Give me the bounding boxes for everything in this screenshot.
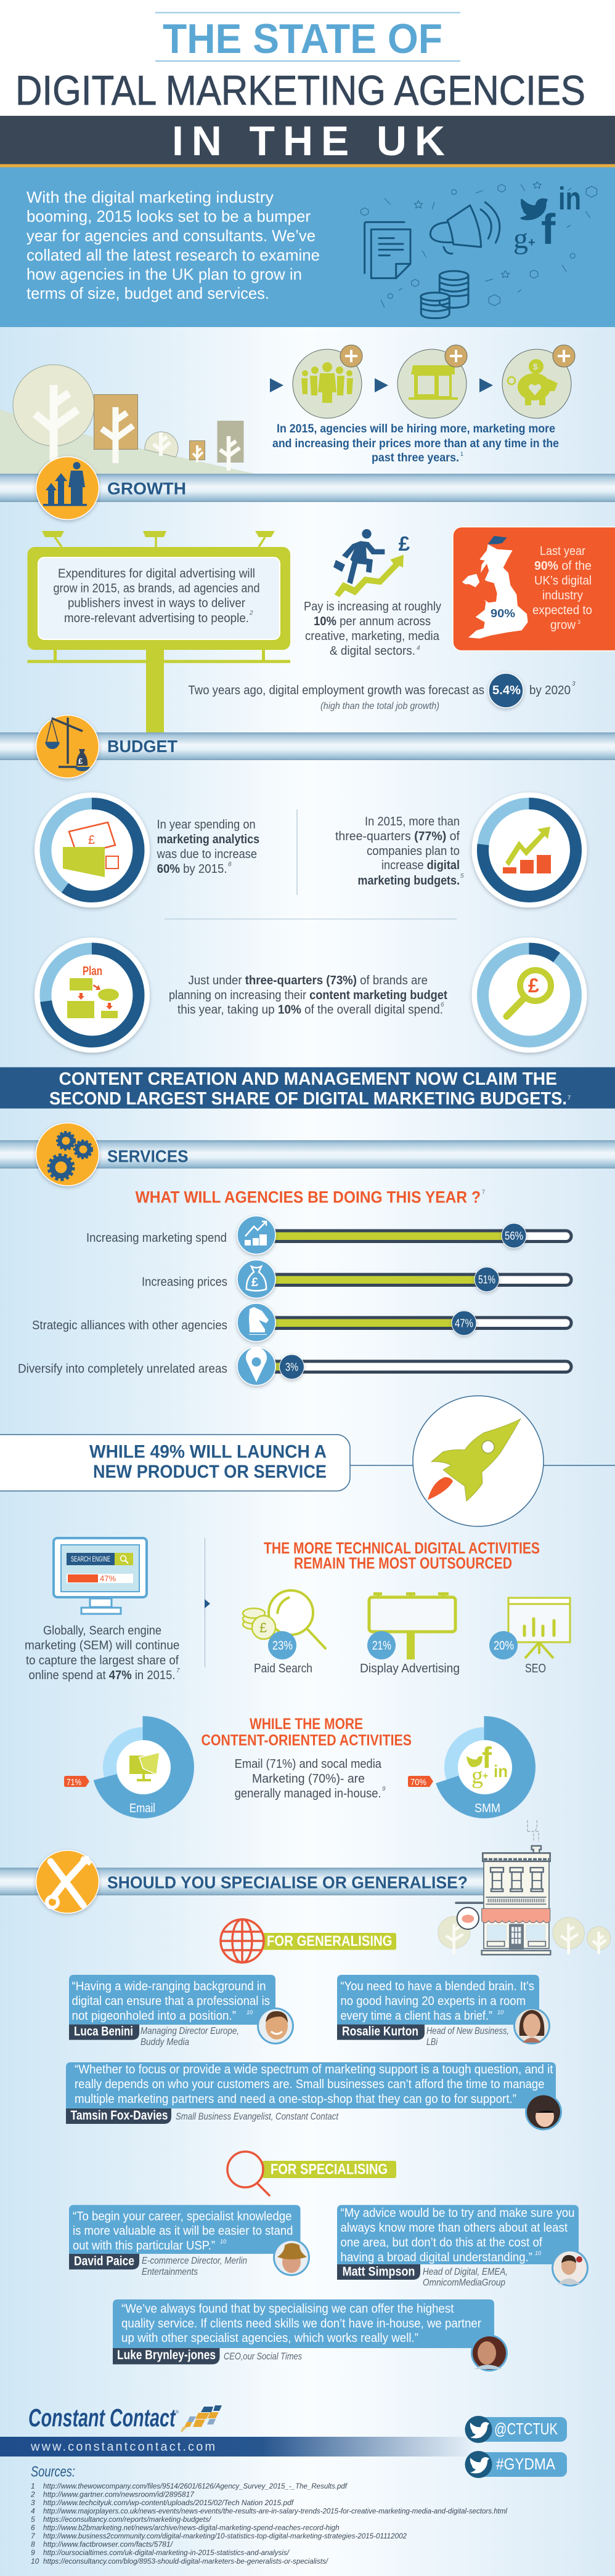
quote: rosalie kurton: Head of New Business,: [426, 2026, 509, 2036]
text: in-house: 9: [382, 1786, 386, 1792]
quote: rosalie kurton: Rosalie Kurton: [342, 2024, 418, 2038]
text: search engine marketing: Globally, Search engine: [43, 1624, 161, 1637]
circle: piggy bank: $: [533, 362, 538, 371]
sources: 6: [31, 2523, 35, 2532]
uk text: industry: [542, 589, 583, 602]
quote: luke brynley-jones: Luke Brynley-jones: [117, 2348, 216, 2362]
badge 5.4%: [489, 673, 523, 708]
quote: rosalie kurton: 10: [497, 2009, 503, 2015]
section header: budget: [0, 715, 615, 778]
quote: rosalie kurton: no good having 20 experts in a room: [340, 1995, 526, 2008]
intro text: [26, 188, 320, 302]
uk text: grow: [550, 618, 576, 632]
sources: http://www.factbrowser.com/facts/5781/: [43, 2540, 174, 2549]
quote: matt simpson: Head of Digital, EMEA,: [423, 2267, 508, 2277]
text: pay increase: creative, marketing, media: [305, 630, 440, 643]
section header: services: [0, 1123, 615, 1186]
row: prices 51%: 51%: [478, 1274, 495, 1286]
section header: growth: [0, 457, 615, 520]
billboard text: more-relevant advertising to people.: [64, 612, 249, 625]
text: digital employment: (high than the total job growth): [320, 701, 439, 711]
intro text: booming, 2015 looks set to be a bumper: [26, 207, 311, 225]
quote: david paice: [69, 2205, 310, 2277]
icon: plan flowchart: Plan: [83, 965, 102, 978]
text: content marketing: this year, taking up 10% of the overall digital spend.: [177, 1003, 443, 1016]
intro text: year for agencies and consultants. We’ve: [26, 227, 316, 245]
quote: matt simpson: Matt Simpson: [343, 2264, 415, 2278]
heading: content oriented: [201, 1715, 412, 1749]
ring: magnifier 10%: [472, 938, 587, 1053]
billboard text: [53, 567, 260, 625]
sources: 5: [31, 2515, 35, 2524]
quote: luca benini: 10: [246, 2009, 253, 2015]
quote: luke brynley-jones: CEO,our Social Times: [224, 2352, 302, 2362]
divider arrow: [205, 1538, 210, 1667]
text: search engine marketing: to capture the largest share of: [26, 1654, 179, 1667]
hiring marketing prices icons: [270, 345, 575, 464]
quote: rosalie kurton: “You need to have a blended brain. It’s: [340, 1980, 534, 1993]
hill and trees: [0, 365, 255, 474]
quote: luke brynley-jones: “We’ve always found that by specialising we can offer the highest: [121, 2303, 454, 2316]
text: pay increase: [304, 600, 441, 658]
text: analytics: In year spending on: [157, 818, 256, 832]
banner: content creation: [0, 1067, 615, 1109]
panel: intro: [0, 168, 615, 327]
uk text: Last year: [540, 545, 585, 558]
quote: tamsin fox-davies: [66, 2062, 562, 2130]
quote: luca benini: not pigeonholed into a position.”: [71, 2009, 236, 2023]
quote: matt simpson: [337, 2205, 589, 2288]
icon: paid search 23%: Paid Search: [254, 1662, 312, 1675]
icon: rocket: [413, 1396, 544, 1526]
banner: content creation: SECOND LARGEST SHARE OF DIGITAL MARKETING BUDGETS.: [49, 1089, 567, 1109]
icon: paid search 23%: £: [259, 1620, 267, 1635]
billboard text: Expenditures for digital advertising will: [58, 567, 255, 580]
sources: [30, 2464, 507, 2566]
heading: GROWTH: [107, 479, 186, 498]
badge 70%: 70%: [410, 1777, 426, 1788]
text: digital budgets: companies plan to: [367, 844, 460, 858]
bar chart: agency plans: [18, 1216, 571, 1385]
icons: social: +: [528, 236, 536, 249]
title band: in the uk: IN THE UK: [172, 118, 445, 164]
icon: email monitor: [129, 1752, 160, 1781]
text: analytics: 60% by 2015.: [157, 862, 227, 876]
icon: social logos: [466, 1742, 508, 1789]
icon: monitor search: SEARCH ENGINE: [71, 1555, 110, 1563]
heading: what will agencies: WHAT WILL AGENCIES BE DOING THIS YEAR ?: [136, 1188, 481, 1207]
icon: gears: [36, 1123, 99, 1186]
tree 4: [190, 441, 205, 463]
icon: scales: [36, 715, 99, 778]
sources: 4: [31, 2507, 35, 2516]
row: marketing spend 56%: 56%: [505, 1229, 523, 1242]
quote: rosalie kurton: LBi: [426, 2037, 438, 2047]
text: hiring more: [272, 423, 559, 464]
text: pay increase: Pay is increasing at roughly: [304, 600, 441, 614]
row: diversify 3%: 3%: [285, 1361, 298, 1374]
quote: matt simpson: one area, but don’t do this at the cost of: [340, 2236, 542, 2250]
badge 70%: [408, 1776, 433, 1788]
text: digital employment: [189, 673, 576, 711]
quote: david paice: “To begin your career, specialist knowledge: [73, 2209, 292, 2223]
photo: [513, 2007, 550, 2044]
label: for specialising: [227, 2152, 396, 2195]
quote: matt simpson: always know more than others about at least: [340, 2221, 568, 2235]
icon: scales: £: [78, 756, 83, 766]
row: marketing spend 56%: [86, 1216, 571, 1254]
tree 1: [13, 365, 94, 462]
button: @ctctuk: @CTCTUK: [494, 2420, 558, 2438]
icons: social: f: [541, 205, 556, 253]
row: alliances 47%: Strategic alliances with other agencies: [32, 1319, 227, 1332]
text: content marketing: Just under three-quarters (73%) of brands are: [189, 974, 428, 987]
panel: uk 90%: 90%: [491, 607, 515, 620]
icon: plan flowchart: [67, 965, 119, 1018]
text: content marketing: 6: [441, 1002, 444, 1008]
text: digital employment: by 2020: [529, 684, 571, 697]
icon: seo 20%: 20%: [494, 1639, 514, 1653]
quote: david paice: Entertainments: [142, 2267, 198, 2277]
arrow 1: [270, 378, 283, 392]
sources: 8: [31, 2540, 35, 2549]
circle: shop: [397, 345, 467, 418]
icon: social logos: in: [494, 1762, 508, 1781]
sources: http://www.b2bmarketing.net/news/archive/news-digital-marketing-spend-reaches-record-high: [43, 2523, 340, 2532]
callout: new product: [0, 1396, 615, 1526]
banner: content creation: CONTENT CREATION AND MANAGEMENT NOW CLAIM THE: [59, 1069, 557, 1089]
title band: in the uk: [0, 116, 615, 168]
donut: email 71%: [64, 1727, 183, 1815]
heading: technical activities: THE MORE TECHNICAL DIGITAL ACTIVITIES: [264, 1539, 540, 1557]
icon: growth: [36, 457, 99, 520]
photo: [273, 2239, 310, 2276]
uk text: UK’s digital: [534, 574, 592, 588]
sources: 3: [31, 2498, 35, 2507]
icon: social logos: +: [483, 1771, 488, 1781]
quote: david paice: David Paice: [74, 2254, 134, 2268]
footer bar: [0, 2437, 476, 2457]
sources: http://www.gartner.com/newsroom/id/2895817: [43, 2490, 195, 2498]
icon: shop and trees: [438, 1820, 611, 1954]
icon: social logos: f: [482, 1742, 492, 1775]
quote: luca benini: Buddy Media: [141, 2037, 189, 2047]
text: search engine marketing: marketing (SEM) will continue: [25, 1639, 180, 1653]
uk text: [532, 545, 592, 632]
icons: social: in: [558, 181, 581, 217]
text: in-house: generally managed in-house.: [235, 1787, 381, 1800]
icon: wallet: £: [88, 833, 95, 847]
text: analytics: marketing analytics: [157, 833, 259, 846]
quote: david paice: 10: [220, 2238, 226, 2245]
intro text: how agencies in the UK plan to grow in: [26, 265, 302, 283]
icon: social logos: g: [471, 1763, 483, 1789]
text: hiring more: 1: [460, 451, 463, 457]
title: the state of: THE STATE OF: [163, 15, 442, 62]
quote: david paice: out with this particular USP.”: [73, 2239, 215, 2253]
sources: 2: [30, 2490, 35, 2498]
text: analytics: 8: [228, 861, 232, 868]
quote: tamsin fox-davies: “Whether to focus or provide a wide spectrum of marketing support is a tough question, and it: [75, 2063, 553, 2076]
quote: luke brynley-jones: quality service. If clients need skills we don’t have in-house, we partner: [121, 2317, 481, 2330]
icon: display advertising 21%: 21%: [372, 1639, 391, 1653]
icon: monitor search: 47%: [100, 1574, 116, 1583]
sources: http://www.techcityuk.com/wp-content/uploads/2015/02/Tech Nation 2015.pdf: [43, 2498, 295, 2507]
quote: luca benini: Managing Director Europe,: [141, 2026, 239, 2036]
heading: technical activities: REMAIN THE MOST OUTSOURCED: [294, 1553, 512, 1572]
text: digital employment: 3: [572, 681, 576, 687]
quote: luca benini: digital can ensure that a professional is: [71, 1995, 270, 2008]
sources: 9: [31, 2548, 35, 2557]
text: search engine marketing: [25, 1624, 180, 1682]
intro text: collated all the latest research to examine: [26, 246, 320, 264]
sources: Sources:: [31, 2464, 75, 2481]
sources: 7: [31, 2532, 36, 2540]
heading: content oriented: CONTENT-ORIENTED ACTIVITIES: [201, 1732, 412, 1749]
arrow 2: [375, 378, 388, 392]
sources: http://www.business2community.com/digital-marketing/10-statistics-top-digital-marketing-strategies-2015-01112002: [43, 2532, 407, 2540]
quote: rosalie kurton: [337, 1975, 550, 2047]
text: pay increase: 4: [417, 645, 420, 652]
circle: people: [293, 345, 362, 418]
heading: what will agencies: 7: [482, 1189, 485, 1195]
text: digital budgets: three-quarters (77%) of: [335, 830, 460, 843]
panel: uk 90%: [453, 527, 615, 650]
quote: luca benini: “Having a wide-ranging background in: [71, 1980, 266, 1993]
icons: marketing doodles: [361, 182, 597, 318]
quote: luca benini: [69, 1975, 294, 2047]
text: hiring more: past three years.: [372, 452, 459, 464]
circle: piggy bank: [502, 345, 575, 418]
text: digital budgets: In 2015, more than: [365, 815, 460, 828]
tree 5: [217, 421, 244, 471]
text: hiring more: and increasing their prices more than at any time in the: [272, 437, 559, 450]
label: for generalising: FOR GENERALISING: [267, 1933, 392, 1950]
text: content marketing: planning on increasing their content marketing budget: [169, 989, 447, 1002]
icon: display advertising 21%: [360, 1592, 460, 1675]
button: #gydma: [465, 2451, 567, 2478]
heading: BUDGET: [107, 737, 177, 756]
row: prices 51%: Increasing prices: [142, 1275, 227, 1289]
billboard text: grow in 2015, as brands, ad agencies and: [53, 582, 260, 596]
text: in-house: [235, 1757, 386, 1800]
button: @ctctuk: [465, 2416, 567, 2443]
billboard text: 2: [249, 610, 253, 617]
row: alliances 47%: 47%: [455, 1317, 473, 1329]
photo: [525, 2093, 562, 2130]
quote: tamsin fox-davies: multiple marketing partners and need a one-stop-shop that they can go to for support.”: [75, 2092, 516, 2106]
text: digital employment: Two years ago, digital employment growth was forecast as: [189, 684, 484, 697]
sources: 10: [31, 2557, 39, 2566]
text: digital budgets: [335, 815, 464, 888]
text: analytics: [157, 818, 259, 876]
icon: seo 20%: [489, 1598, 570, 1675]
sources: http://www.thewowcompany.com/files/9514/2601/6126/Agency_Survey_2015_-_The_Results.pdf: [43, 2482, 348, 2490]
logo: constant contact: ®: [176, 2410, 179, 2415]
icon: magnifier: [227, 2152, 269, 2195]
ring: analytics 60%: [35, 792, 150, 908]
photo: [257, 2007, 294, 2044]
callout: new product: WHILE 49% WILL LAUNCH A: [89, 1441, 327, 1462]
uk text: 3: [577, 619, 580, 625]
text: pay increase: 10% per annum across: [314, 615, 431, 628]
tree 2: [94, 394, 138, 463]
sources: https://econsultancy.com/reports/marketing-budgets/: [43, 2515, 212, 2524]
icon: magnifier pound: [507, 970, 551, 1016]
donut: email 71%: Email: [129, 1802, 155, 1815]
icon: tools: [36, 1850, 99, 1913]
billboard text: publishers invest in ways to deliver: [68, 597, 245, 610]
uk text: expected to: [532, 604, 592, 617]
badge 5.4%: 5.4%: [492, 684, 521, 697]
quote: luke brynley-jones: [113, 2299, 508, 2371]
icon: magnifier pound: £: [528, 974, 539, 997]
intro text: With the digital marketing industry: [26, 188, 274, 206]
icons: social: g: [513, 222, 528, 255]
heading: content oriented: WHILE THE MORE: [250, 1715, 363, 1733]
row: prices 51%: £: [251, 1276, 258, 1289]
text: search engine marketing: 7: [176, 1667, 180, 1674]
text: digital budgets: increase digital: [381, 859, 460, 872]
callout: new product: NEW PRODUCT OR SERVICE: [93, 1462, 327, 1482]
sources: 1: [31, 2482, 35, 2490]
row: prices 51%: [142, 1260, 571, 1298]
row: alliances 47%: [32, 1303, 571, 1342]
icon: paid search 23%: [243, 1590, 325, 1675]
row: marketing spend 56%: Increasing marketing spend: [86, 1231, 227, 1245]
text: content marketing: [169, 974, 447, 1016]
banner: content creation: 7: [568, 1095, 571, 1101]
billboard: [27, 531, 290, 733]
quote: luca benini: Luca Benini: [74, 2024, 133, 2038]
icon: seo 20%: SEO: [525, 1662, 546, 1675]
quote: tamsin fox-davies: really depends on who your customers are. Small businesses can’t afford the time to manage: [75, 2078, 545, 2091]
heading: SHOULD YOU SPECIALISE OR GENERALISE?: [107, 1873, 468, 1892]
icon: globe: [221, 1919, 264, 1962]
quote: matt simpson: OmnicomMediaGroup: [423, 2278, 505, 2288]
label: for generalising: [221, 1919, 396, 1962]
logo: constant contact: Constant Contact: [28, 2404, 176, 2432]
ring: plan 73%: [35, 938, 150, 1053]
icon: paid search 23%: 23%: [272, 1639, 293, 1653]
label: for specialising: FOR SPECIALISING: [271, 2161, 388, 2178]
icon: uk map: [462, 536, 528, 639]
icon: monitor search: [54, 1538, 147, 1614]
sources: https://econsultancy.com/blog/8953-should-digital-marketers-be-generalists-or-specialists/: [43, 2557, 329, 2566]
logo mark: [181, 2405, 222, 2432]
sources: http://www.majorplayers.co.uk/news-events/news-events/the-results-are-in-salary-trends-2015-for-creative-marketing-media-and-digital-sectors.html: [43, 2507, 507, 2516]
photo: [552, 2250, 589, 2286]
quote: rosalie kurton: every time a client has a brief.”: [340, 2009, 492, 2023]
photo: [471, 2335, 508, 2371]
button: #gydma: #GYDMA: [496, 2455, 556, 2473]
row: diversify 3%: Diversify into completely unrelated areas: [18, 1363, 227, 1376]
quote: matt simpson: having a broad digital understanding.”: [340, 2251, 532, 2264]
quote: luke brynley-jones: up with other specialist agencies, which works really well.”: [121, 2331, 418, 2345]
quote: tamsin fox-davies: Small Business Evangelist, Constant Contact: [176, 2112, 338, 2122]
icons: social: [513, 181, 581, 255]
quote: david paice: E-commerce Director, Merlin: [142, 2256, 247, 2266]
donut: smm 70%: [408, 1727, 524, 1815]
text: pay increase: & digital sectors.: [330, 644, 415, 658]
icon: businessman on arrow: [333, 529, 410, 597]
heading: SERVICES: [107, 1147, 189, 1166]
row: diversify 3%: [18, 1347, 571, 1385]
heading: technical activities: [264, 1539, 540, 1572]
icon: wallet: [63, 822, 118, 877]
text: digital budgets: marketing budgets.: [357, 874, 460, 888]
text: in-house: Email (71%) and socal media: [235, 1757, 382, 1771]
text: search engine marketing: online spend at 47% in 2015.: [28, 1669, 175, 1682]
text: analytics: was due to increase: [157, 848, 257, 861]
ring: budgets 77%: [472, 792, 587, 908]
text: digital budgets: 5: [460, 873, 464, 880]
quote: tamsin fox-davies: Tamsin Fox-Davies: [70, 2108, 168, 2123]
icon: display advertising 21%: Display Advertising: [360, 1662, 460, 1675]
section header: specialise or generalise: [0, 1850, 484, 1913]
quote: matt simpson: 10: [535, 2250, 541, 2256]
uk text: 90% of the: [534, 559, 592, 573]
icon: businessman on arrow: £: [399, 533, 410, 556]
quote: matt simpson: “My advice would be to try and make sure you: [340, 2206, 574, 2220]
intro text: terms of size, budget and services.: [26, 284, 269, 302]
text: hiring more: In 2015, agencies will be hiring more, marketing more: [277, 423, 555, 435]
tree 3: [145, 432, 178, 457]
badge 71%: 71%: [67, 1777, 81, 1788]
icon: chart and coins: [503, 827, 551, 873]
sources: http://oursocialtimes.com/uk-digital-marketing-in-2015-statistics-and-analysis/: [43, 2548, 290, 2557]
arrow 3: [479, 378, 493, 392]
quote: david paice: is more valuable as it will be easier to stand: [73, 2224, 293, 2238]
footer bar: www.constantcontact.com: [30, 2440, 215, 2454]
badge 71%: [64, 1776, 89, 1788]
donut: smm 70%: SMM: [474, 1802, 500, 1815]
text: in-house: Marketing (70%)- are: [252, 1772, 365, 1786]
